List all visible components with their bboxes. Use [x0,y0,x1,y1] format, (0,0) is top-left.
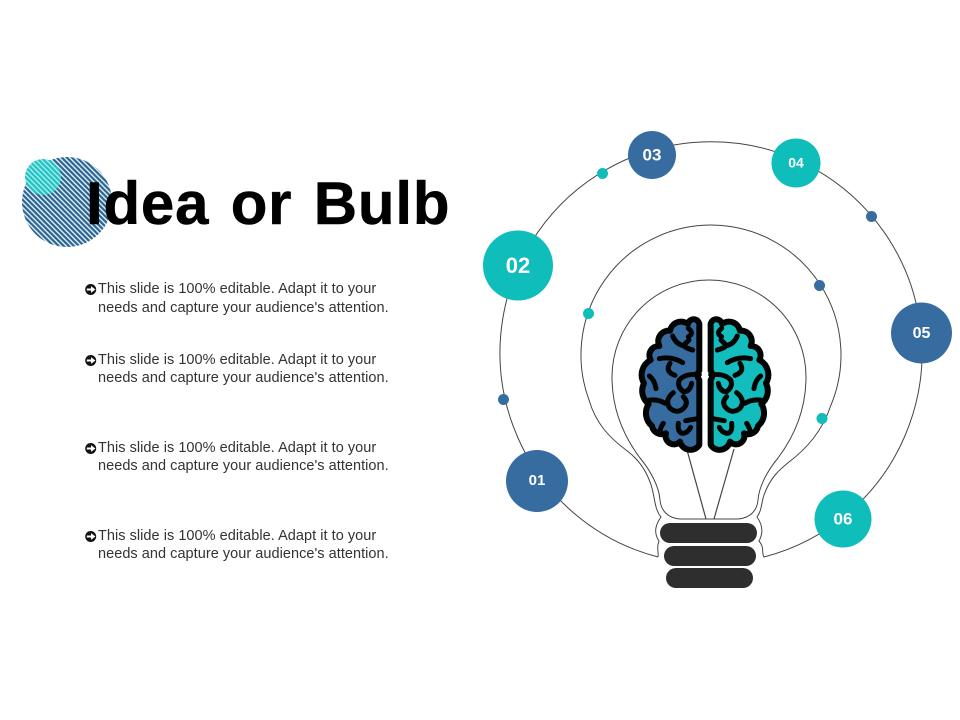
text block 2: needs and capture your audience's attention. [98,370,389,386]
text block 1: needs and capture your audience's attention. [98,300,389,316]
node 04 [772,138,820,188]
decorative hatched circle behind title [22,157,112,247]
node 01: 01 [529,472,545,489]
filament lines [687,449,734,519]
text block 3: This slide is 100% editable. Adapt it to your [98,440,376,456]
node 04: 04 [788,154,804,170]
node 06: 06 [834,510,852,528]
small dots on rings [498,168,877,424]
node 02 [483,230,553,300]
bulb base [660,523,757,588]
bulb outline rings [500,142,922,557]
node 03 [628,131,676,179]
node 06 [814,490,872,548]
node 05: 05 [913,325,930,342]
icon: brain [642,319,768,450]
node 01 [506,450,568,512]
text block 1 [85,281,389,316]
title: Idea or Bulb [86,170,450,237]
text block 4: This slide is 100% editable. Adapt it to your [98,528,376,544]
node 03: 03 [643,146,661,164]
text block 3: needs and capture your audience's attention. [98,458,389,474]
text block 3 [85,440,389,474]
text block 4: needs and capture your audience's attention. [98,546,389,562]
node 02: 02 [506,253,530,278]
text block 2: This slide is 100% editable. Adapt it to your [98,352,376,368]
text block 4 [85,528,389,562]
text block 1: This slide is 100% editable. Adapt it to your [98,281,376,297]
right hemisphere [711,319,768,450]
node 05 [891,302,952,364]
text block 2 [85,352,389,386]
left hemisphere [642,319,699,450]
